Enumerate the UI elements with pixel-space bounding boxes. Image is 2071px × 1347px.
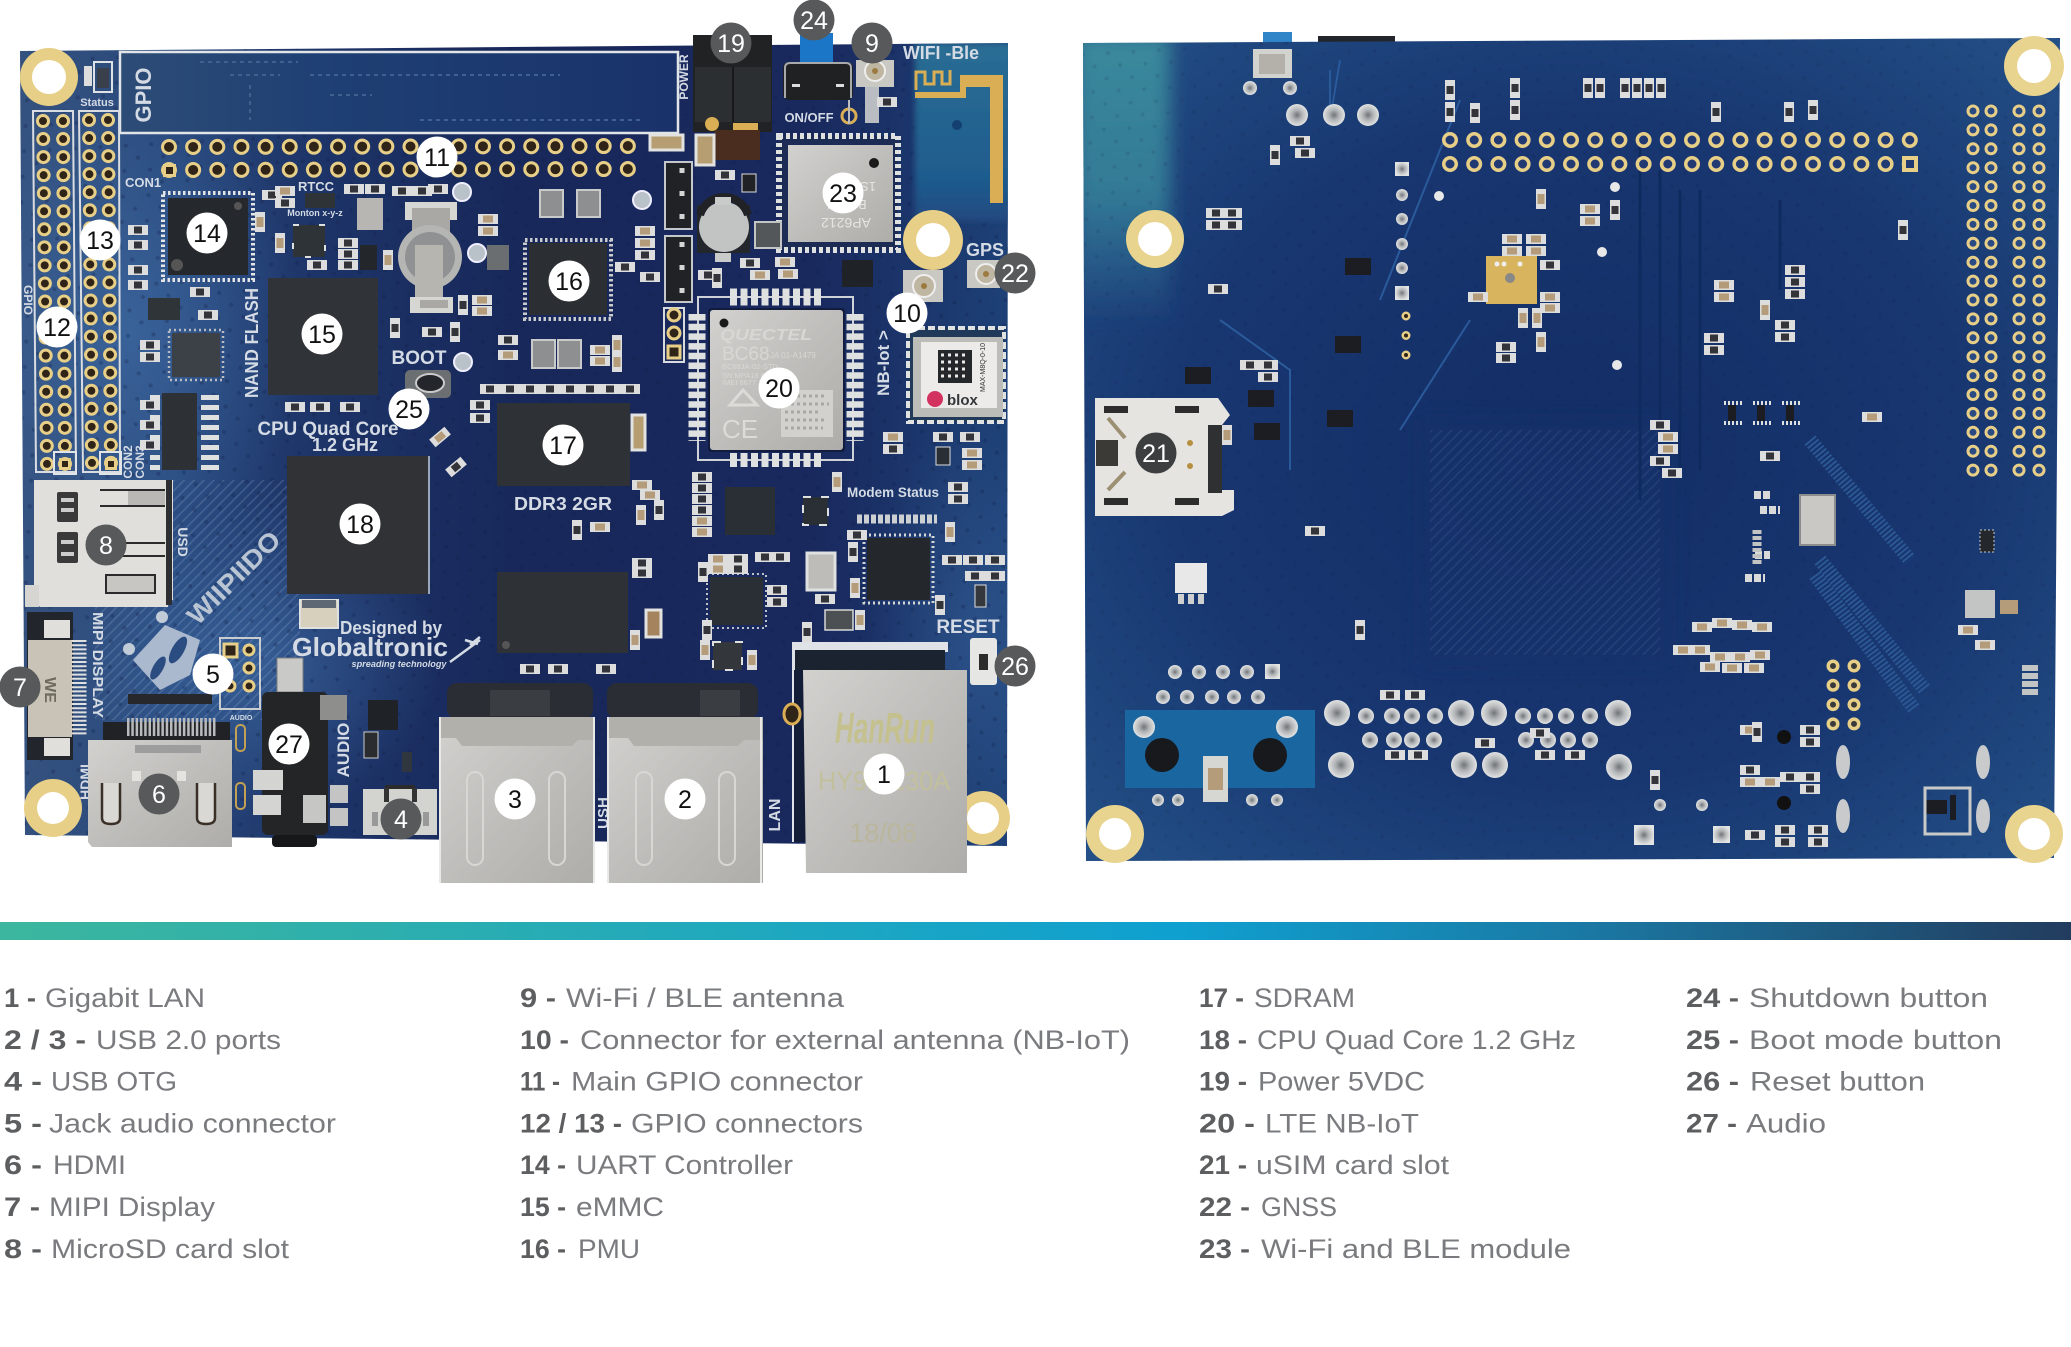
legend column 2: eMMC [576,1192,664,1222]
marker 3: 3 [508,786,522,814]
silkscreen labels: AUDIO [334,723,353,777]
legend column 1 [4,983,336,1264]
legend column 4 [1686,983,2002,1138]
Globaltronic credit: spreading technology [352,659,448,669]
LTE NB-IoT module: SN MPA18 612 [722,371,773,380]
LAN port: HY911130A [818,766,950,796]
legend column 3: 18 - [1199,1025,1247,1055]
legend column 3: 21 - [1199,1150,1247,1180]
panel: board back view [1075,32,2064,863]
marker 4 [380,798,422,840]
legend column 1: USB OTG [51,1067,177,1097]
GNSS module [908,328,1004,422]
marker 14 [186,212,228,254]
surface mount parts, back [1206,78,2030,847]
back side GPIO pads [1973,111,2039,473]
GPIO silk box: GPIO [131,67,156,123]
legend column 3: LTE NB-IoT [1265,1108,1419,1138]
silkscreen labels: HDMI [77,764,93,800]
legend column 2: 11 - [520,1067,560,1097]
Wi-Fi and BLE module [779,136,898,250]
LAN port: HanRun [835,704,935,753]
silkscreen labels: USD [175,527,191,557]
legend column 1: HDMI [53,1150,126,1180]
LTE NB-IoT module: BC68 [722,344,770,365]
legend column 3: 20 - [1199,1108,1255,1138]
small ICs [148,193,933,670]
USB port 2 [607,683,763,883]
legend column 1: 1 - [4,983,36,1013]
legend column 4: Reset button [1750,1067,1925,1097]
board back PCB [1075,35,2063,863]
marker 7: 7 [13,674,27,702]
silkscreen labels: ON/OFF [784,110,834,125]
silkscreen labels: CON2 [121,445,135,479]
silkscreen labels: NB-Iot > [874,330,893,396]
legend column 1: MicroSD card slot [51,1234,290,1264]
legend column 3: Wi-Fi and BLE module [1261,1234,1571,1264]
SDRAM chip [497,403,630,486]
legend column 2: Connector for external antenna (NB-IoT) [580,1025,1130,1055]
marker 3 [494,778,536,820]
marker 2: 2 [678,786,692,814]
LAN port: 18/06 [849,818,917,848]
marker 1 [864,754,904,794]
wifi antenna connector [856,60,894,123]
Wiipiido logo: WIIPIIDO [181,525,287,631]
legend column 1: 4 - [4,1067,42,1097]
LAN port [784,642,967,873]
boot mode button [405,370,451,398]
silkscreen labels: CON3 [133,445,147,479]
back SOT transistors [1185,258,1956,820]
marker 14: 14 [193,220,221,248]
silkscreen labels: LAN [767,799,784,831]
marker 15: 15 [308,321,336,349]
GPIO silk box [120,52,678,133]
marker 20 [758,368,800,408]
marker 21: 21 [1142,440,1170,468]
legend column 3: SDRAM [1254,983,1355,1013]
silkscreen labels: CON1 [125,175,161,190]
marker 6: 6 [152,781,166,809]
LTE NB-IoT module: JA 01-A1479 [770,351,816,360]
marker 18: 18 [346,511,374,539]
marker 17 [542,424,584,466]
Globaltronic credit [292,600,480,669]
marker 13: 13 [86,227,114,255]
silkscreen labels: CPU Quad Core [258,419,398,440]
PMU chip [525,240,611,319]
status LED: Status [80,97,114,109]
surface mount parts, front [128,97,1005,674]
silkscreen labels [77,43,1004,831]
marker 8 [86,524,126,566]
back teal connector pad [1125,710,1315,788]
second SDRAM chip [497,572,628,653]
marker 24: 24 [800,7,828,35]
marker 10 [886,292,928,334]
Wi-Fi and BLE module: AP6212 [821,215,871,231]
marker 7 [0,666,40,708]
coin cell holder [357,183,509,371]
board front PCB [20,43,1008,846]
back oval and gold pads [1145,182,1990,833]
marker 23 [822,172,864,214]
main GPIO connector [163,146,630,177]
legend column 1: 8 - [4,1234,42,1264]
GPIO connector 13 [79,111,121,474]
GNSS connector [967,260,1000,288]
marker 12: 12 [43,314,71,342]
reset button [970,638,997,685]
USB port 3 [440,683,594,883]
silkscreen labels: POWER [677,54,691,100]
microSD card slot [25,480,173,607]
marker 2 [664,778,706,820]
silkscreen labels: BOOT [392,348,447,369]
legend column 3 [1199,983,1576,1264]
marker 27: 27 [275,731,303,759]
legend column 3: GNSS [1261,1192,1337,1222]
legend column 2: 15 - [520,1192,566,1222]
legend column 2: 16 - [520,1234,566,1264]
marker 22: 22 [1001,260,1029,288]
GPIO connector 12 [21,111,76,474]
silkscreen labels: GPS [966,240,1004,260]
legend column 4: Boot mode button [1749,1025,2002,1055]
panel: board front view [0,33,1085,883]
Wi-Fi and BLE module: B1 041 [825,197,867,212]
Wiipiido logo [123,525,287,690]
legend column 2: 10 - [520,1025,569,1055]
marker 19 [710,22,752,64]
numbered markers [0,0,1176,840]
marker 18 [340,504,380,544]
LTE NB-IoT module: QUECTEL [720,327,812,344]
legend column 2: PMU [578,1234,640,1264]
legend column 2 [520,983,1130,1264]
marker 10: 10 [893,300,921,328]
back main GPIO pads [1450,140,1918,172]
legend column 2: 9 - [520,983,556,1013]
legend column 2: 14 - [520,1150,566,1180]
mounting hole bottom right [956,791,1010,845]
MIPI display connector: WE [41,677,58,703]
mounting hole right [903,210,963,270]
legend column 1: 5 - [4,1108,42,1138]
silkscreen labels: RTCC [298,179,335,194]
LTE NB-IoT module: CE [722,414,758,444]
marker 16 [548,260,590,302]
gradient divider bar [0,922,2071,940]
marker 5 [192,654,234,694]
legend column 3: 22 - [1199,1192,1250,1222]
legend column 4: 26 - [1686,1067,1739,1097]
legend column 1: MIPI Display [49,1192,216,1222]
LTE NB-IoT module [697,297,855,460]
UART controller chip [163,193,253,280]
legend column 2: Wi-Fi / BLE antenna [566,983,845,1013]
legend column 2: GPIO connectors [631,1108,863,1138]
legend column 1: USB 2.0 ports [96,1025,281,1055]
back gold centre pad [1486,256,1537,304]
legend column 1: 7 - [4,1192,40,1222]
legend column 1: Jack audio connector [49,1108,336,1138]
legend column 2: 12 / 13 - [520,1108,622,1138]
legend column 4: 25 - [1686,1025,1739,1055]
legend column 1: 6 - [4,1150,42,1180]
CPU chip [287,456,429,594]
LTE NB-IoT module: BC68JA-02-STD [722,362,778,371]
silkscreen labels: TX-RX-GND [662,170,672,220]
marker 11: 11 [424,144,450,172]
Globaltronic credit: Designed by [340,618,442,638]
back through-hole pads [1133,81,1730,845]
legend column 4: 27 - [1686,1108,1737,1138]
marker 8: 8 [99,532,113,560]
legend column 3: 19 - [1199,1067,1247,1097]
Globaltronic credit: Globaltronic [292,632,448,662]
GNSS module: MAX-M8Q-0-10 [980,343,987,392]
silkscreen labels: Monton x-y-z [287,208,343,218]
silkscreen labels: Modem Status [847,484,939,500]
silkscreen labels: MIPI DISPLAY [89,612,106,718]
marker 6 [138,774,180,814]
mounting hole top left [20,48,78,106]
GPIO connector 12: GPIO [21,285,35,315]
mounting hole bottom left [24,779,82,837]
uSIM card slot [1095,398,1234,516]
legend column 1: Gigabit LAN [45,983,205,1013]
marker 17: 17 [549,432,577,460]
silkscreen labels: DDR3 2GR [514,494,612,514]
back capacitor and white square [1175,563,1228,802]
marker 25: 25 [395,396,423,424]
silkscreen labels: 1.2 GHz [312,435,378,455]
marker 26 [994,646,1036,686]
legend column 2: Main GPIO connector [571,1067,863,1097]
legend column 3: Power 5VDC [1258,1067,1425,1097]
regulator near USB OTG [364,700,398,758]
legend column 3: 17 - [1199,983,1244,1013]
pin headers [664,162,692,362]
back top connector tabs [1263,32,1395,42]
audio jack header: AUDIO [230,715,253,722]
marker 1: 1 [877,761,891,789]
wifi antenna area [915,43,1013,221]
HDMI port [88,722,245,847]
marker 11 [416,136,458,178]
marker 16: 16 [555,268,583,296]
legend column 4: Audio [1746,1108,1826,1138]
marker 5: 5 [206,661,220,689]
LTE NB-IoT module: IMEI 8677 277 [722,378,771,387]
legend column 4: Shutdown button [1749,983,1988,1013]
marker 25 [388,388,430,430]
marker 23: 23 [829,180,857,208]
legend column 3: CPU Quad Core 1.2 GHz [1257,1025,1576,1055]
marker 15 [302,314,342,354]
audio jack header [128,638,260,722]
power connector [693,35,772,165]
legend column 3: 23 - [1199,1234,1250,1264]
marker 9: 9 [865,30,879,58]
silkscreen labels: RESET [936,617,1000,638]
shutdown button [783,33,856,124]
legend column 4: 24 - [1686,983,1739,1013]
marker 12 [36,306,78,348]
marker 22 [994,252,1036,294]
marker 24 [794,0,834,40]
marker 19: 19 [717,30,745,58]
back crystal [1253,49,1835,545]
back mounting holes [1086,36,2064,863]
capacitor [697,197,781,262]
silkscreen labels: NAND FLASH [242,288,262,398]
silkscreen labels: USH [595,797,612,829]
legend column 1: 2 / 3 - [4,1025,86,1055]
marker 13 [80,220,120,260]
USB OTG port [363,752,437,835]
MIPI display connector [27,612,79,760]
marker 21 [1136,432,1176,474]
silkscreen labels: WIFI -Ble [903,43,979,63]
status LED [80,62,114,109]
marker 27 [268,724,310,764]
marker 9 [852,22,892,64]
audio jack [253,658,348,847]
external antenna connector [903,270,943,302]
GNSS module: blox [947,392,978,409]
marker 4: 4 [394,806,408,834]
back ghost traces [1220,60,1925,710]
marker 20: 20 [765,375,793,403]
eMMC chip [268,278,378,395]
legend column 2: UART Controller [576,1150,793,1180]
marker 26: 26 [1001,653,1029,681]
Wi-Fi and BLE module: 1S [860,179,876,194]
legend column 3: uSIM card slot [1256,1150,1450,1180]
